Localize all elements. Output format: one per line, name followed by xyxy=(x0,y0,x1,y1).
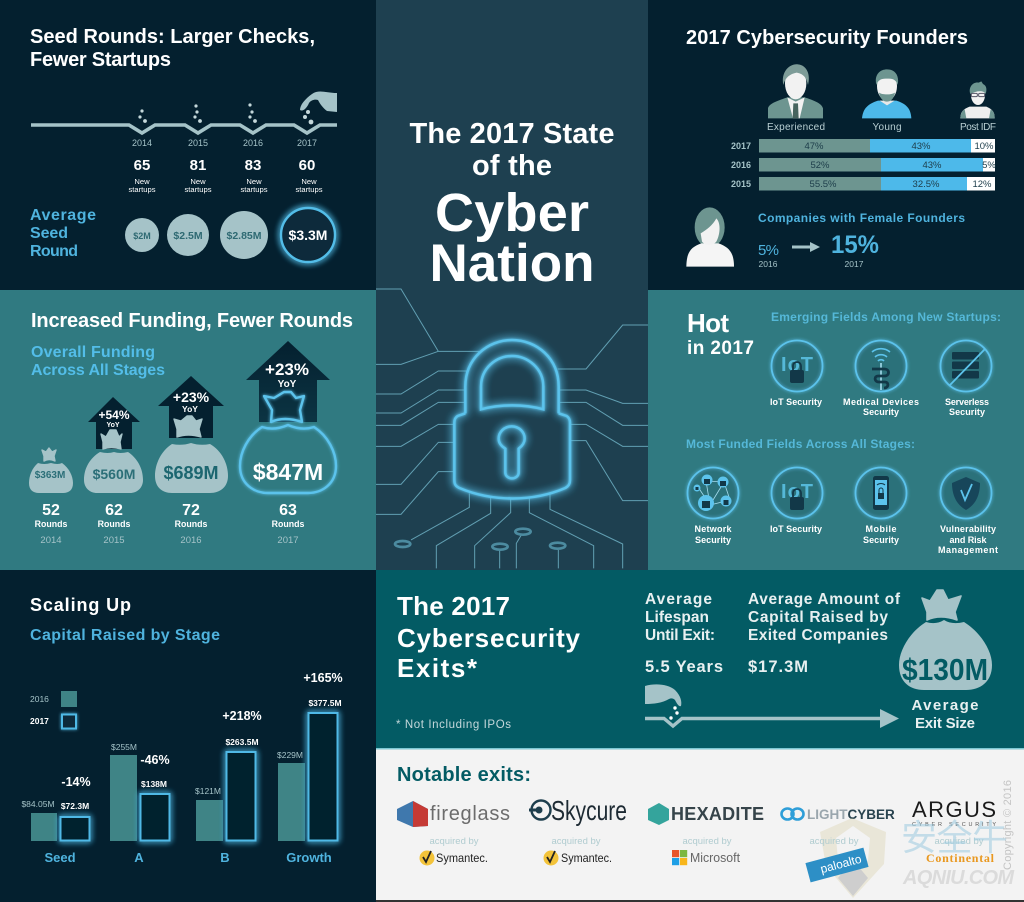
funding years: 2016 xyxy=(180,535,202,546)
stat: lifespan: Until Exit: xyxy=(645,627,715,644)
2017 values: $138M xyxy=(141,779,167,789)
exit size amount: $130M xyxy=(902,652,988,687)
rounds labels: Rounds xyxy=(35,519,67,529)
funded labels: Security xyxy=(695,535,731,545)
new startups labels: New xyxy=(301,177,317,186)
funded labels: Security xyxy=(863,535,899,545)
yoy labels: YoY xyxy=(182,404,198,414)
stacked bar chart: founders by year: 5% xyxy=(982,160,996,171)
legend: 2017 xyxy=(30,716,49,726)
exit size label xyxy=(912,697,978,732)
legend xyxy=(30,691,77,728)
yoy labels: YoY xyxy=(106,422,120,429)
icon: medical devices xyxy=(872,349,890,390)
stat: capital raised: Average Amount of xyxy=(748,591,901,608)
yoy labels: +54% xyxy=(98,408,130,422)
2016 values: $121M xyxy=(195,786,221,796)
stat: lifespan: Average xyxy=(645,591,712,608)
new startups counts: 65 xyxy=(134,157,150,174)
percent changes: -46% xyxy=(140,753,170,767)
logo: argus: CYBER SECURITY xyxy=(912,822,996,828)
exit size label: Average xyxy=(912,697,978,714)
money bags 2014 to 2016 xyxy=(29,416,228,493)
subheading: overall funding xyxy=(31,344,165,379)
new startups labels: startups xyxy=(184,185,212,194)
icon: mobile security xyxy=(873,476,889,510)
stat: lifespan xyxy=(645,591,723,676)
label: average seed round xyxy=(30,207,96,260)
heading: founders: 2017 Cybersecurity Founders xyxy=(686,27,968,49)
years xyxy=(132,138,317,148)
panel: cyber nation centre xyxy=(376,0,648,570)
stacked bar chart: founders by year: 43% xyxy=(922,160,942,171)
logo: fireglass: fireglass xyxy=(430,803,510,825)
watermark: shield xyxy=(820,818,886,898)
new startups counts: 81 xyxy=(190,157,206,174)
logo: continental: Continental xyxy=(926,851,995,865)
label: average seed round: Average xyxy=(30,207,96,224)
copyright: Copyright © 2016 xyxy=(1002,780,1014,870)
female founders stat: 5% xyxy=(758,242,779,259)
funded labels: Management xyxy=(938,545,998,555)
icon: iot security emerging: IoT xyxy=(781,354,813,376)
heading: seed rounds xyxy=(30,26,315,71)
subheading: emerging fields: Emerging Fields Among New Startups: xyxy=(771,310,1001,324)
stage labels: B xyxy=(220,850,230,865)
icon: padlock xyxy=(454,340,570,498)
main title: of the xyxy=(472,150,552,182)
logo: symantec 2 xyxy=(544,850,612,866)
logo: skycure: Skycure xyxy=(551,795,627,826)
icons: founder portraits xyxy=(768,64,995,118)
money bag 2017 outlined xyxy=(240,392,336,493)
rounds counts: 63 xyxy=(279,502,297,519)
acquired by labels: acquired by xyxy=(429,836,479,847)
stacked bar chart: founders by year: 55.5% xyxy=(810,179,837,190)
new startups labels: New xyxy=(134,177,150,186)
bag amounts: $689M xyxy=(163,463,219,483)
new startups labels xyxy=(128,177,323,194)
2017 values: $72.3M xyxy=(61,801,89,811)
subheading: capital raised: Capital Raised by Stage xyxy=(30,627,220,644)
bag amounts xyxy=(35,459,323,485)
panel: hot in 2017 xyxy=(648,290,1024,570)
main title: The 2017 State xyxy=(410,118,614,150)
circles: average seed: $3.3M xyxy=(289,227,327,243)
2016 values: $229M xyxy=(277,750,303,760)
new startups labels: startups xyxy=(240,185,268,194)
heading: increased funding: Increased Funding, Fewer Rounds xyxy=(31,310,353,332)
female founders stat xyxy=(758,211,965,269)
stat: capital raised: $17.3M xyxy=(748,658,808,676)
founder labels: Experienced xyxy=(767,122,825,133)
circles: average seed: $2M xyxy=(133,231,151,241)
stacked bar chart: founders by year: 10% xyxy=(974,141,994,152)
main title: Nation xyxy=(430,234,594,293)
logo: fireglass xyxy=(397,801,510,827)
arrows: year over year xyxy=(88,341,330,449)
emerging labels: IoT Security xyxy=(770,397,822,407)
main title xyxy=(410,118,614,293)
rounds counts: 72 xyxy=(182,502,200,519)
rounds counts: 62 xyxy=(105,502,123,519)
stacked bar chart: founders by year: 52% xyxy=(810,160,830,171)
years: 2015 xyxy=(188,138,208,148)
stacked bar chart: founders by year: 2016 xyxy=(731,160,751,170)
funding years: 2015 xyxy=(103,535,125,546)
heading: hot: in 2017 xyxy=(687,338,754,359)
stacked bar chart: founders by year: 32.5% xyxy=(913,179,940,190)
panel: cybersecurity exits xyxy=(376,570,1024,748)
circuit lines xyxy=(376,289,648,568)
new startups labels: startups xyxy=(128,185,156,194)
watermark: site name: 安全牛 xyxy=(901,817,1008,858)
circles: average seed: $2.5M xyxy=(173,230,203,242)
stacked bar chart: founders by year: 12% xyxy=(972,179,992,190)
stat: capital raised: Exited Companies xyxy=(748,627,888,644)
logo: symantec 2: Symantec. xyxy=(561,851,612,865)
emerging labels: Security xyxy=(863,407,899,417)
logo: symantec 1 xyxy=(420,850,488,866)
yoy labels: +23% xyxy=(265,360,309,379)
2017 values xyxy=(61,698,342,811)
acquired by labels: acquired by xyxy=(934,836,984,847)
heading: hot: Hot xyxy=(687,308,729,338)
female founders stat: Companies with Female Founders xyxy=(758,211,965,225)
percent changes xyxy=(61,671,343,789)
2016 values: $84.05M xyxy=(21,799,55,809)
rounds labels: Rounds xyxy=(175,519,207,529)
stacked bar chart: founders by year: 2015 xyxy=(731,179,751,189)
emerging labels: Medical Devices xyxy=(843,397,919,407)
yoy labels: YoY xyxy=(278,379,297,390)
bag amounts: $847M xyxy=(253,459,323,485)
funded labels: Network xyxy=(694,524,732,534)
stage labels: Seed xyxy=(44,850,76,865)
heading: exits xyxy=(397,591,581,683)
percent changes: -14% xyxy=(61,775,91,789)
icon rings xyxy=(688,340,992,518)
logo: lightcyber: LIGHTCYBER xyxy=(807,807,895,822)
main title: Cyber xyxy=(435,183,589,243)
logo: argus: ARGUS xyxy=(912,797,996,822)
logo: hexadite: HEXADITE xyxy=(671,804,764,824)
timeline arrow with hand xyxy=(645,684,899,728)
icon: dropping coins xyxy=(138,103,313,124)
funded labels: and Risk xyxy=(950,535,987,545)
acquired by labels: acquired by xyxy=(551,836,601,847)
female founders stat: 2017 xyxy=(845,259,864,269)
logo: palo alto xyxy=(805,848,869,882)
footnote: * Not Including IPOs xyxy=(396,719,511,731)
female founders stat: 15% xyxy=(831,231,879,259)
stage labels: A xyxy=(134,850,144,865)
stacked bar chart: founders by year: 47% xyxy=(804,141,824,152)
2016 values: $255M xyxy=(111,742,137,752)
2016 values xyxy=(21,742,303,809)
acquired by labels xyxy=(429,836,984,847)
icon: iot security funded: IoT xyxy=(781,481,813,503)
rounds labels xyxy=(35,519,304,529)
bar chart: capital raised by stage xyxy=(21,671,343,865)
logo: palo alto: paloalto xyxy=(819,852,863,876)
bag amounts: $560M xyxy=(93,466,135,482)
stat: lifespan: Lifespan xyxy=(645,609,709,626)
years: 2014 xyxy=(132,138,152,148)
funding years xyxy=(40,535,299,546)
acquired by labels: acquired by xyxy=(809,836,859,847)
2017 values: $263.5M xyxy=(225,737,259,747)
funded labels xyxy=(694,524,998,555)
new startups labels: New xyxy=(246,177,262,186)
heading: exits: The 2017 xyxy=(397,591,510,621)
rounds counts xyxy=(42,502,297,519)
circles: average seed xyxy=(125,208,335,262)
label: average seed round: Round xyxy=(30,243,78,260)
acquired by labels: acquired by xyxy=(682,836,732,847)
stat: capital raised: Capital Raised by xyxy=(748,609,888,626)
legend: 2016 xyxy=(30,694,49,704)
funded labels: Vulnerability xyxy=(940,524,996,534)
funding years: 2017 xyxy=(277,535,299,546)
watermark: site name: AQNIU.COM xyxy=(902,867,1015,889)
panel: cybersecurity founders xyxy=(648,0,1024,290)
icon: network security xyxy=(694,474,732,511)
yoy labels: +23% xyxy=(173,389,210,405)
heading: exits: Exits* xyxy=(397,653,478,683)
stat: lifespan: 5.5 Years xyxy=(645,658,723,676)
stage labels xyxy=(44,850,332,865)
emerging labels: Serverless xyxy=(945,397,989,407)
label: average seed round: Seed xyxy=(30,225,68,242)
timeline line with dips xyxy=(31,125,337,133)
female founders stat: 2016 xyxy=(759,259,778,269)
stacked bar chart: founders by year: 2017 xyxy=(731,141,751,151)
panel: notable exits xyxy=(376,748,1024,902)
icon: serverless xyxy=(950,349,985,385)
founder labels: Young xyxy=(872,122,902,133)
heading: scaling up: Scaling Up xyxy=(30,595,131,615)
subheading: most funded: Most Funded Fields Across All Stages: xyxy=(686,437,915,451)
emerging labels xyxy=(770,397,989,417)
yoy labels xyxy=(98,360,309,429)
heading: notable exits: Notable exits: xyxy=(397,764,531,786)
stage labels: Growth xyxy=(286,850,332,865)
years: 2016 xyxy=(243,138,263,148)
logo: symantec 1: Symantec. xyxy=(436,851,488,865)
icon: hand xyxy=(300,91,337,112)
rounds labels: Rounds xyxy=(272,519,304,529)
new startups labels: New xyxy=(190,177,206,186)
percent changes: +218% xyxy=(222,709,262,723)
funded labels: Mobile xyxy=(866,524,896,534)
exit size label: Exit Size xyxy=(915,715,975,732)
icon: female founder xyxy=(686,207,734,267)
rounds counts: 52 xyxy=(42,502,60,519)
years: 2017 xyxy=(297,138,317,148)
logo: microsoft: Microsoft xyxy=(690,850,740,865)
heading: hot xyxy=(687,308,754,359)
panel: seed rounds xyxy=(0,0,376,290)
new startups labels: startups xyxy=(295,185,323,194)
stacked bar chart: founders by year xyxy=(731,139,996,190)
percent changes: +165% xyxy=(303,671,343,685)
subheading: overall funding: Across All Stages xyxy=(31,362,165,379)
stacked bar chart: founders by year: 43% xyxy=(911,141,931,152)
2017 values: $377.5M xyxy=(308,698,342,708)
bag amounts: $363M xyxy=(35,470,65,481)
heading: seed rounds: Fewer Startups xyxy=(30,49,171,71)
stat: capital raised xyxy=(748,591,901,676)
watermark: site name xyxy=(901,817,1015,889)
new startups counts: 60 xyxy=(299,157,315,174)
circles: average seed: $2.85M xyxy=(226,230,262,242)
icon: shield check xyxy=(952,477,980,510)
logo: skycure xyxy=(529,795,627,826)
panel: scaling up xyxy=(0,570,376,902)
subheading: overall funding: Overall Funding xyxy=(31,344,155,361)
new startups counts xyxy=(134,157,315,174)
rounds labels: Rounds xyxy=(98,519,130,529)
money bag: average exit size xyxy=(899,590,992,690)
founder labels: Post IDF xyxy=(960,122,996,133)
heading: seed rounds: Seed Rounds: Larger Checks, xyxy=(30,26,315,48)
new startups counts: 83 xyxy=(245,157,261,174)
panel: increased funding xyxy=(0,290,376,570)
founder labels xyxy=(767,122,996,133)
funding years: 2014 xyxy=(40,535,62,546)
emerging labels: Security xyxy=(949,407,985,417)
heading: exits: Cybersecurity xyxy=(397,623,581,653)
funded labels: IoT Security xyxy=(770,524,822,534)
